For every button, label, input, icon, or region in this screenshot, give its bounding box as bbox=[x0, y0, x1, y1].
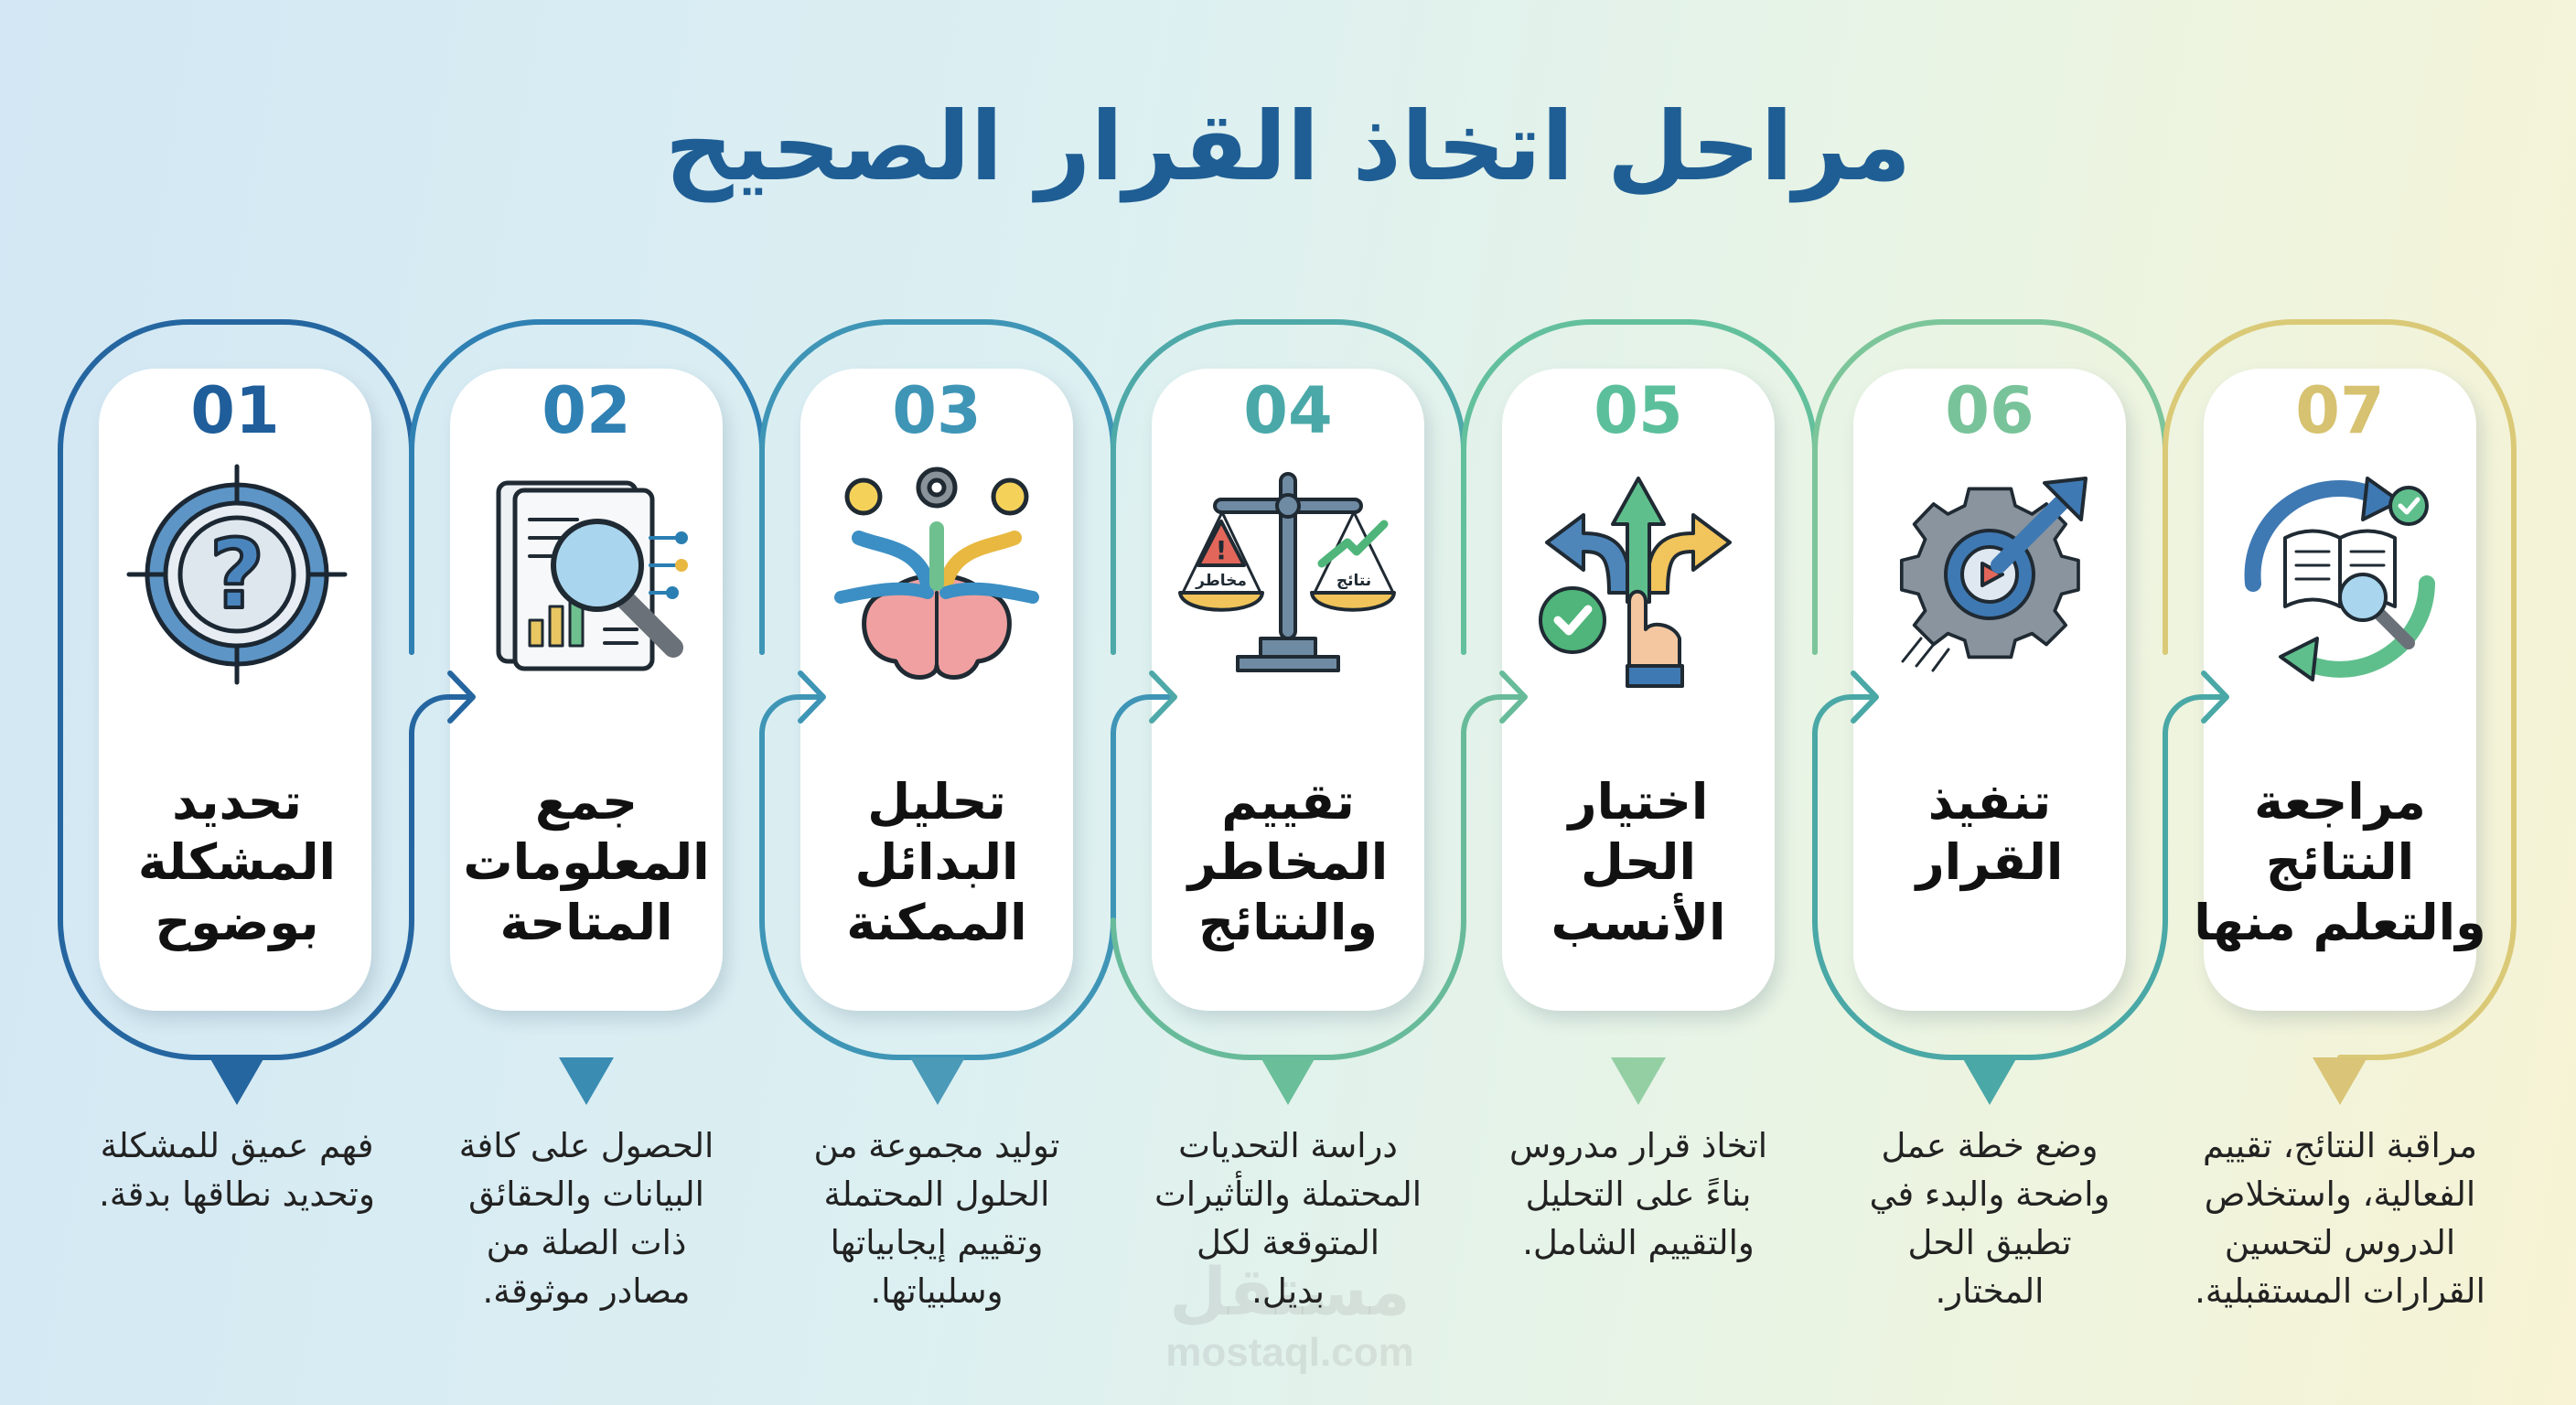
icon: scale risks vs outcomes bbox=[1180, 474, 1394, 670]
text: الحل bbox=[1581, 833, 1696, 891]
text: الحلول المحتملة bbox=[824, 1174, 1049, 1214]
text: وتقييم إيجابياتها bbox=[831, 1223, 1043, 1262]
icon: target question bbox=[129, 467, 345, 682]
text: وسلبياتها. bbox=[870, 1271, 1004, 1311]
icon: choosing path bbox=[1540, 478, 1730, 686]
icon: scale risks vs outcomes: مخاطر bbox=[1195, 572, 1247, 590]
text: توليد مجموعة من bbox=[814, 1126, 1059, 1165]
text: 01 bbox=[190, 373, 280, 448]
outline: step 7 bbox=[2165, 322, 2514, 1057]
text: ذات الصلة من bbox=[487, 1223, 686, 1262]
text: تطبيق الحل bbox=[1907, 1223, 2072, 1262]
pointer triangles bbox=[209, 1057, 2367, 1105]
icon: scale risks vs outcomes: نتائج bbox=[1336, 572, 1371, 590]
text: 07 bbox=[2295, 373, 2385, 448]
text: النتائج bbox=[2266, 833, 2414, 891]
text: الدروس لتحسين bbox=[2225, 1223, 2455, 1262]
text: جمع bbox=[535, 773, 638, 831]
text: وتحديد نطاقها بدقة. bbox=[99, 1174, 375, 1214]
text: مراجعة bbox=[2254, 773, 2426, 831]
text: تحديد bbox=[172, 773, 302, 831]
watermark bbox=[1165, 1253, 1414, 1375]
text: والتقييم الشامل. bbox=[1522, 1223, 1755, 1262]
outline: step 3 bbox=[762, 322, 1173, 1057]
outline: step 6 bbox=[1815, 322, 2165, 652]
outline: step 5 bbox=[1464, 322, 1815, 652]
text: واضحة والبدء في bbox=[1870, 1174, 2109, 1214]
text: الفعالية، واستخلاص bbox=[2205, 1174, 2475, 1214]
watermark: mostaql.com bbox=[1165, 1330, 1414, 1375]
text: بوضوح bbox=[155, 894, 319, 951]
card 6 bbox=[1853, 369, 2126, 1011]
text: 03 bbox=[892, 373, 982, 448]
title: مراحل اتخاذ القرار الصحيح bbox=[665, 91, 1911, 202]
text: القرارات المستقبلية. bbox=[2195, 1271, 2485, 1311]
step numbers bbox=[190, 373, 2385, 448]
text: فهم عميق للمشكلة bbox=[101, 1126, 373, 1165]
text: بديل. bbox=[1251, 1271, 1325, 1311]
text: وضع خطة عمل bbox=[1881, 1126, 2098, 1165]
outline: step 1 bbox=[60, 322, 473, 1057]
card titles bbox=[138, 773, 2486, 951]
card 3 bbox=[800, 369, 1073, 1011]
icon: brain with options bbox=[841, 469, 1033, 677]
text: الممكنة bbox=[846, 894, 1027, 951]
text: المختار. bbox=[1936, 1271, 2044, 1311]
card 2 bbox=[450, 369, 723, 1011]
descriptions bbox=[99, 1126, 2485, 1311]
outline: step 4 bbox=[1113, 322, 1464, 721]
icon: document with magnifier bbox=[499, 483, 688, 669]
text: والنتائج bbox=[1198, 894, 1378, 951]
text: المخاطر bbox=[1188, 833, 1388, 891]
text: المشكلة bbox=[138, 833, 336, 891]
text: القرار bbox=[1916, 833, 2063, 891]
card 1 bbox=[99, 369, 371, 1011]
icon: target question: ? bbox=[209, 519, 264, 630]
text: الحصول على كافة bbox=[459, 1126, 714, 1165]
text: 05 bbox=[1594, 373, 1683, 448]
text: 04 bbox=[1243, 373, 1333, 448]
card 7 bbox=[2204, 369, 2476, 1011]
text: تحليل bbox=[867, 773, 1006, 831]
text: تقييم bbox=[1221, 773, 1355, 831]
text: والتعلم منها bbox=[2194, 894, 2486, 951]
text: 02 bbox=[542, 373, 631, 448]
text: المعلومات bbox=[463, 833, 710, 891]
text: مصادر موثوقة. bbox=[483, 1271, 690, 1311]
text: اختيار bbox=[1569, 773, 1708, 831]
icon: scale risks vs outcomes: ! bbox=[1216, 535, 1227, 565]
text: بناءً على التحليل bbox=[1526, 1174, 1751, 1214]
watermark: مستقل bbox=[1169, 1253, 1411, 1330]
text: المتوقعة لكل bbox=[1197, 1223, 1379, 1262]
text: تنفيذ bbox=[1928, 773, 2051, 831]
text: البيانات والحقائق bbox=[468, 1174, 704, 1214]
icon: review cycle bbox=[2253, 478, 2427, 680]
text: دراسة التحديات bbox=[1178, 1126, 1398, 1165]
text: اتخاذ قرار مدروس bbox=[1509, 1126, 1767, 1165]
text: البدائل bbox=[854, 833, 1019, 891]
text: الأنسب bbox=[1551, 894, 1726, 951]
card 4 bbox=[1152, 369, 1424, 1011]
icon: gear and rising arrow bbox=[1902, 478, 2086, 670]
text: مراقبة النتائج، تقييم bbox=[2203, 1126, 2477, 1165]
text: المتاحة bbox=[499, 894, 672, 951]
card 5 bbox=[1502, 369, 1775, 1011]
outline: step 2 bbox=[412, 322, 762, 652]
text: المحتملة والتأثيرات bbox=[1154, 1174, 1422, 1214]
text: 06 bbox=[1945, 373, 2034, 448]
